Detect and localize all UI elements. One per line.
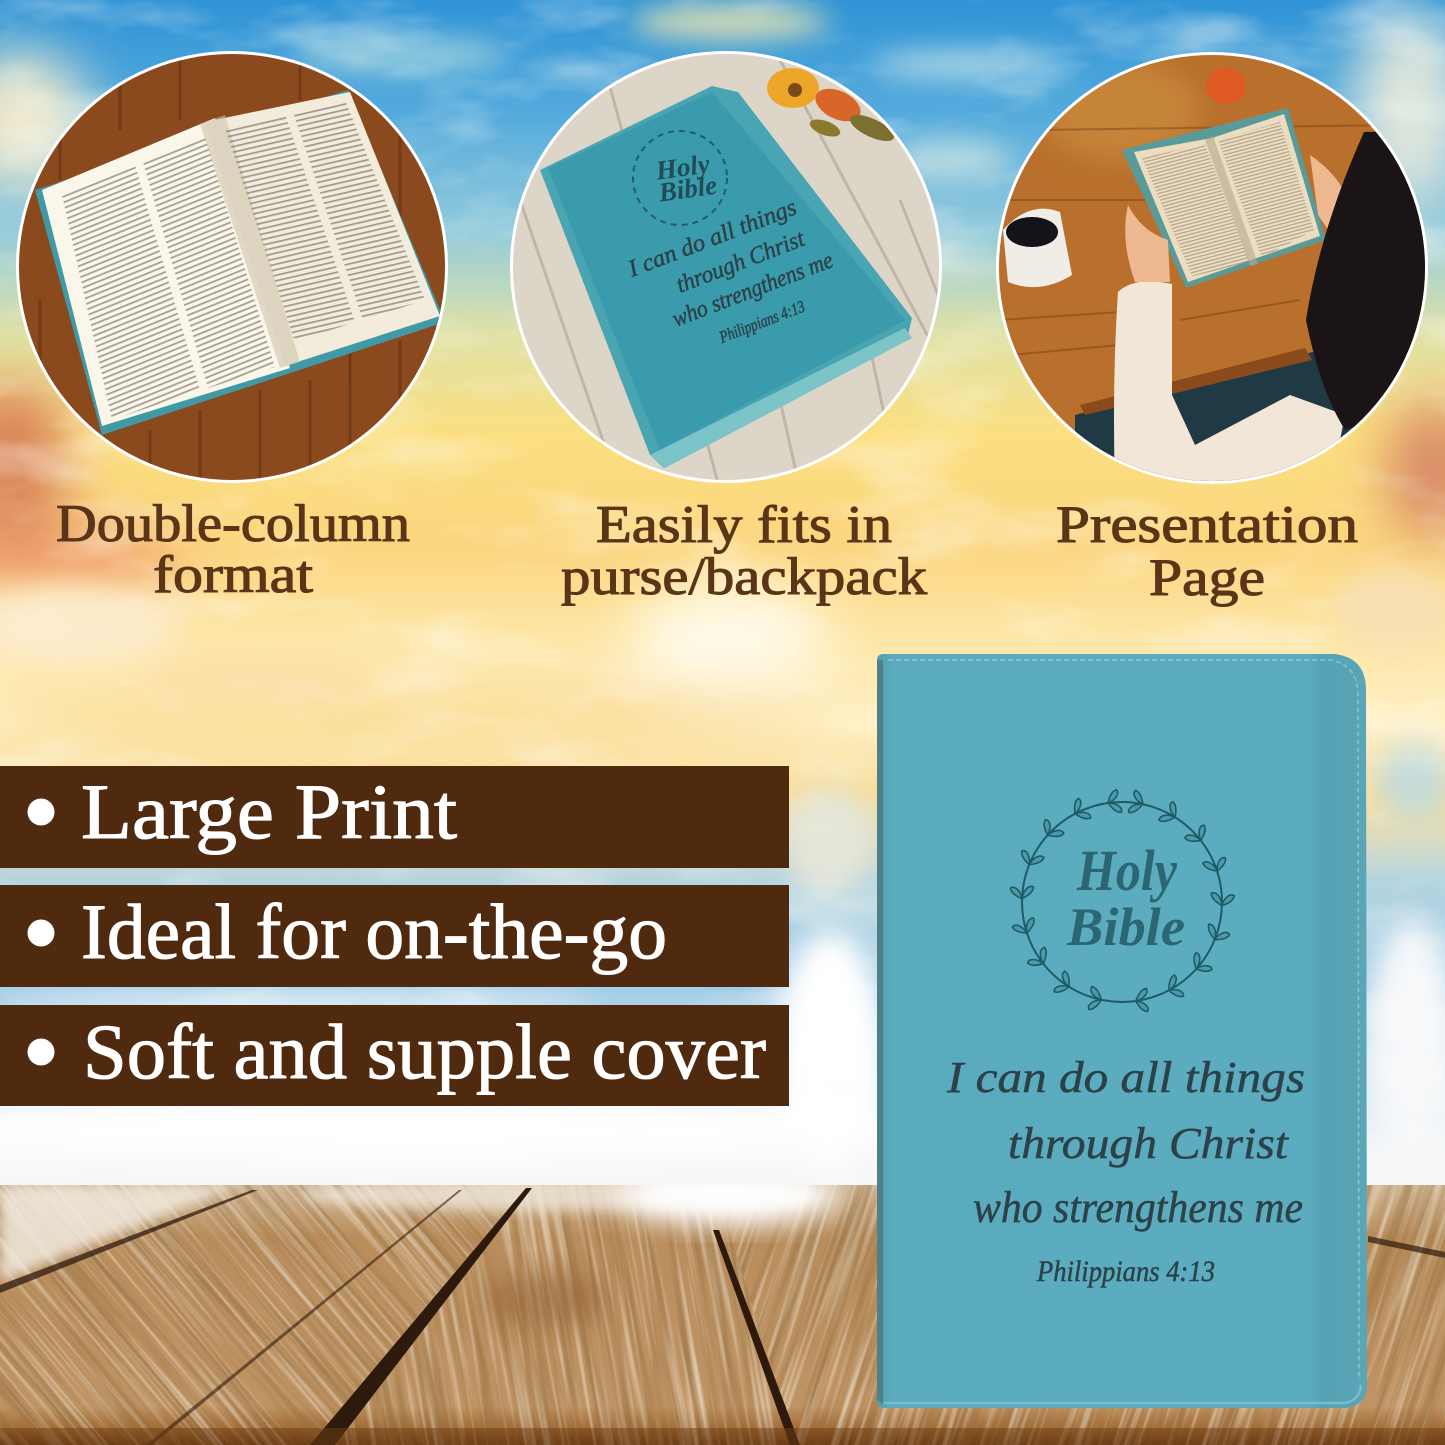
circle photo: closed bible cover on light wood: who strengthens me — [669, 247, 837, 333]
bullet bar: soft and supple cover: Soft and supple cover — [83, 1008, 766, 1095]
circle photo: closed bible cover on light wood — [505, 45, 955, 495]
caption: double-column format: format — [153, 546, 313, 604]
product: teal bible cover — [877, 654, 1367, 1408]
bullet bar: ideal for on-the-go: Ideal for on-the-go — [81, 888, 667, 975]
circle photo: closed bible cover on light wood: Philippians 4:13 — [716, 297, 807, 347]
circle photo: open bible on wood — [10, 45, 460, 495]
bullet bar: large print — [0, 766, 789, 868]
caption: presentation page: Presentation — [1056, 496, 1358, 554]
circle photo: closed bible cover on light wood: Holy — [654, 148, 712, 186]
caption: presentation page — [1056, 496, 1358, 607]
wreath emblem — [1010, 789, 1234, 1013]
verse text: who strengthens me — [973, 1183, 1303, 1232]
circle photo: woman reading at table — [990, 45, 1440, 495]
verse text: Philippians 4:13 — [1036, 1255, 1215, 1288]
caption: easily fits in purse/backpack — [561, 496, 928, 606]
circle photo: closed bible cover on light wood: Bible — [656, 170, 719, 208]
circle photo: closed bible cover on light wood: I can do all things — [624, 195, 800, 283]
wreath emblem: Holy — [1076, 838, 1177, 903]
verse text — [946, 1053, 1305, 1288]
wreath emblem: Bible — [1066, 897, 1185, 957]
verse text: I can do all things — [946, 1053, 1305, 1102]
caption: double-column format: Double-column — [56, 495, 410, 553]
caption: double-column format — [56, 495, 410, 604]
verse text: through Christ — [1008, 1119, 1290, 1168]
caption: easily fits in purse/backpack: purse/backpack — [561, 548, 928, 606]
bullet bar: large print: Large Print — [81, 768, 457, 855]
caption: easily fits in purse/backpack: Easily fits in — [596, 496, 892, 554]
bullet bar: ideal for on-the-go — [0, 885, 789, 987]
circle photo: closed bible cover on light wood: through Christ — [673, 225, 809, 299]
wooden table — [0, 1165, 1445, 1445]
caption: presentation page: Page — [1149, 549, 1265, 607]
